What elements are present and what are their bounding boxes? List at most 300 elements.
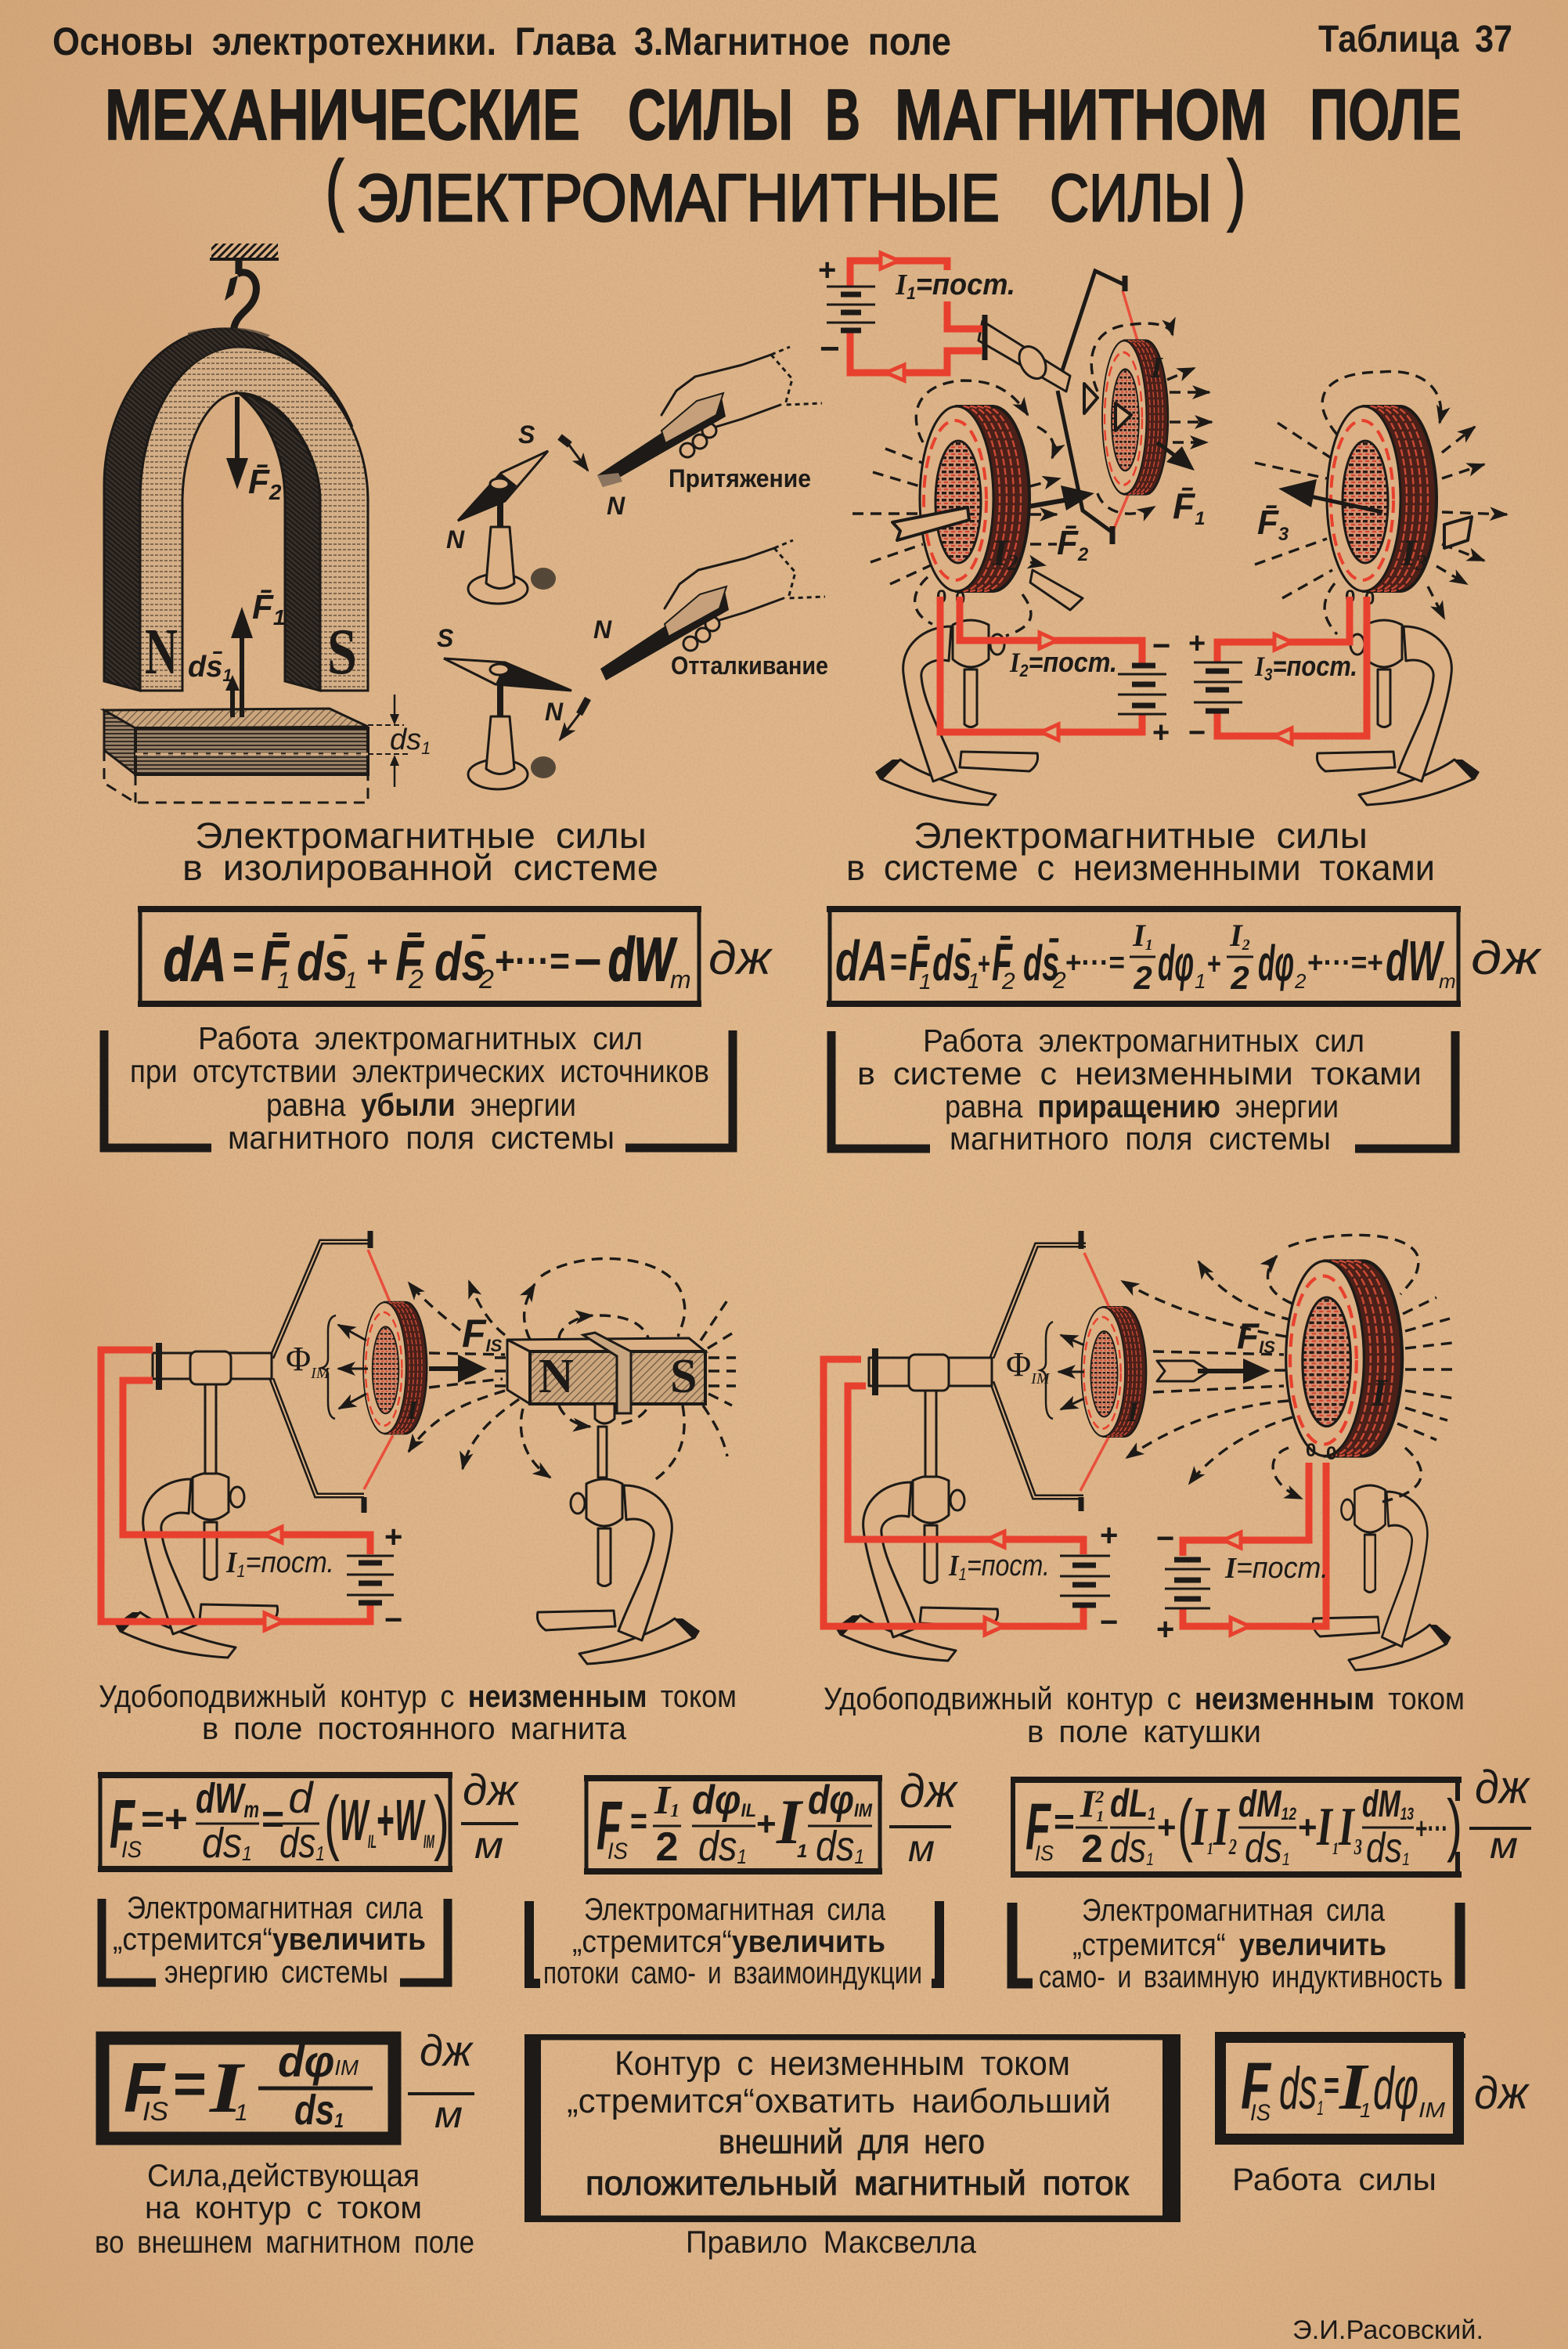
bracket note 2: „стремится“увеличить [572, 1925, 885, 1959]
bracket note 2: потоки само- и взаимоиндукции [543, 1956, 922, 1990]
formula box: isolated system: dA [164, 925, 226, 994]
flux label: Φ [286, 1340, 311, 1378]
formula: magnet: IL [368, 1831, 377, 1853]
force arrow [429, 1312, 503, 1383]
iron armature block [104, 709, 368, 803]
caption: constant currents [846, 815, 1435, 888]
arrow F1 top: F̄ [1173, 485, 1195, 526]
formula: magnet: ds [279, 1820, 324, 1867]
formula: flux: + [756, 1805, 777, 1843]
formula: magnet: d [288, 1773, 314, 1822]
formula box: constant currents: 1 [1145, 936, 1153, 954]
formula: work of force [1216, 2033, 1465, 2139]
circuit I2 [940, 597, 1170, 749]
diagram: repulsion compass: N [545, 698, 564, 726]
formula box: isolated system: dW [608, 925, 677, 994]
bracket note 3 [1012, 1893, 1460, 1994]
circuit I2: I [1009, 647, 1021, 678]
formula: magnet: 1 [315, 1842, 325, 1865]
bracket note 2: Электромагнитная сила [584, 1893, 886, 1927]
formula: flux: ds [698, 1823, 743, 1870]
formula box: constant currents: 2 [1230, 959, 1249, 996]
magnet body: N [145, 615, 178, 688]
stand left [875, 620, 1038, 805]
dimension ds1: ds [390, 723, 421, 756]
circuit I1: 1 [907, 283, 916, 303]
arrow F1: F̄ [252, 588, 273, 626]
arrow F2 top: F̄ [1057, 524, 1078, 562]
caption: isolated system: в изолированной системе [182, 847, 658, 888]
formula: inductance: 1 [1207, 1838, 1213, 1858]
formula: inductance: IS [1035, 1841, 1054, 1865]
arrow F1: ds̄ [188, 651, 222, 684]
caption: permanent magnet [99, 1680, 737, 1746]
coil in loop [363, 1302, 427, 1434]
caption: isolated system: Электромагнитные силы [195, 815, 647, 856]
formula: inductance: dM [1238, 1784, 1292, 1825]
formula box: constant currents: ds̄ [932, 935, 971, 991]
formula: magnet: m [243, 1797, 259, 1823]
bracket text: isolated: магнитного поля системы [228, 1120, 615, 1156]
coil current labels [936, 352, 1427, 609]
field lines coil 2 [852, 381, 1060, 636]
formula: work of force: dφ [1373, 2055, 1418, 2122]
unit J/m: м [434, 2095, 463, 2136]
flux arrows [1040, 1322, 1084, 1419]
flux label: Φ [1006, 1345, 1031, 1384]
formula: force on loop: IS [142, 2097, 168, 2127]
formula: flux: I [776, 1786, 804, 1857]
formula box: constant currents: I [1133, 918, 1145, 953]
title: МАГНИТНОМ [895, 75, 1267, 155]
formula: force on loop: 1 [334, 2109, 344, 2132]
formula: inductance: 2 [1081, 1827, 1103, 1871]
unit J/m [1469, 1761, 1531, 1867]
unit J/m: м [1490, 1825, 1518, 1867]
formula: inductance: + [1298, 1809, 1317, 1846]
formula: work of force: IM [1418, 2098, 1446, 2122]
flux label: IM [310, 1365, 330, 1382]
circuit right: I=пост. [1224, 1552, 1328, 1585]
formula box: isolated system: F̄ [261, 930, 290, 993]
coil current labels: 0 [1364, 588, 1375, 609]
formula: inductance: I [1317, 1797, 1338, 1857]
formula box: constant currents: + [978, 947, 990, 981]
bracket note 1: „стремится“увеличить [113, 1922, 426, 1957]
formula box: constant currents: dφ [1258, 935, 1294, 991]
formula: flux: dφ [808, 1777, 861, 1823]
unit joule: дж [1474, 2068, 1530, 2119]
formula: magnet: = [261, 1797, 284, 1841]
diagram: coils with constant currents [818, 253, 1507, 805]
circuit I2: + [1152, 716, 1170, 749]
formula box: isolated system: +···= [495, 939, 570, 983]
arrow F1 [188, 588, 285, 717]
coil current labels: I [1371, 1370, 1388, 1414]
bracket note 3: Электромагнитная сила [1082, 1893, 1386, 1928]
coil current labels: 0 [1326, 1443, 1336, 1464]
big coil [1286, 1261, 1402, 1456]
coil 2 [920, 406, 1029, 591]
diagram: attraction compass: N [446, 525, 465, 554]
bracket note 3: „стремится“ увеличить [1072, 1928, 1386, 1962]
unit J/m: дж [420, 2026, 474, 2075]
caption: constant currents: Электромагнитные силы [914, 815, 1368, 856]
diagram: horseshoe magnet and armature [104, 244, 431, 803]
formula: magnet: IM [424, 1831, 435, 1853]
arrow F2 top: 2 [1077, 544, 1089, 565]
circuit I2: =пост. [1029, 646, 1117, 678]
caption: permanent magnet: Удобоподвижный контур с неизменным током [99, 1680, 737, 1714]
formula: magnet [98, 1773, 452, 1870]
formula: work of force: IS [1250, 2100, 1271, 2126]
formula: inductance: ds [1366, 1824, 1411, 1871]
formula: magnet: ) [434, 1782, 449, 1862]
coil current labels: 0 [955, 588, 965, 609]
title: ПОЛЕ [1310, 75, 1462, 155]
formula box: isolated system: 2 [478, 965, 494, 994]
coil 3 [1327, 406, 1436, 591]
diagram: repulsion compass [437, 615, 612, 789]
formula: inductance: 3 [1354, 1835, 1362, 1860]
title: МЕХАНИЧЕСКИЕ [105, 75, 580, 155]
unit J/m [461, 1765, 519, 1867]
formula: magnet: =+ [141, 1797, 188, 1841]
bracket text: constant currents: в системе с неизменными токами [857, 1055, 1422, 1092]
icon: ceiling mount and hook [210, 244, 279, 332]
caption: force on loop: на контур с током [145, 2191, 422, 2225]
bracket text: isolated: Работа электромагнитных сил [198, 1020, 643, 1056]
unit J/m: дж [463, 1765, 519, 1814]
circuit left [824, 1359, 1118, 1640]
formula box: constant currents: dφ [1158, 935, 1194, 991]
stand of loop [115, 1473, 278, 1658]
coil current labels [1126, 1370, 1388, 1464]
formula: magnet: ds [202, 1820, 247, 1867]
coil current labels: 3 [1415, 551, 1427, 576]
caption: constant currents: в системе с неизменными токами [846, 847, 1435, 888]
dimension ds1 [368, 695, 431, 787]
unit J/m: дж [899, 1765, 959, 1817]
circuit: I [225, 1546, 238, 1579]
formula: inductance: dM [1362, 1784, 1416, 1825]
formula: inductance: ) [1447, 1785, 1462, 1863]
bracket note 1 [102, 1891, 448, 1990]
coil current: I [406, 1396, 419, 1425]
formula: work of force: F [1241, 2049, 1272, 2123]
diagram: attraction compass [446, 420, 625, 604]
formula: work of force: 1 [1317, 2096, 1324, 2120]
force arrow: IS [486, 1336, 503, 1355]
bracket note 2 [529, 1893, 939, 1990]
formula box: isolated system: m [670, 965, 691, 994]
arrow F2: F̄ [248, 463, 269, 501]
formula box: constant currents: 1 [968, 969, 980, 993]
stand of magnet [537, 1479, 700, 1664]
unit J/m [889, 1765, 959, 1870]
formula box: constant currents: ds̄ [1023, 935, 1059, 991]
permanent magnet [507, 1333, 705, 1478]
formula box: constant currents: dA [835, 930, 888, 993]
formula box: constant currents: F̄ [909, 933, 930, 992]
dimension ds1: 1 [421, 738, 431, 758]
arrow F3: 3 [1278, 524, 1289, 545]
formula box: isolated system: F̄ [395, 930, 425, 993]
caption: force on loop: во внешнем магнитном поле [95, 2225, 474, 2260]
caption: Maxwell rule: Правило Максвелла [686, 2225, 977, 2260]
formula box: isolated system: 1 [277, 968, 290, 994]
coil current labels: 0 [936, 586, 946, 608]
caption: work: Работа силы [1232, 2163, 1436, 2197]
loop frame [869, 1231, 1110, 1511]
formula: flux: IM [854, 1800, 873, 1821]
circuit left: − [1100, 1605, 1118, 1640]
circuit: 1 [236, 1561, 246, 1581]
circuit left: =пост. [967, 1550, 1050, 1582]
circuit right [1156, 1463, 1328, 1647]
diagram: repulsion compass: N [593, 615, 612, 644]
caption: force on loop: Сила,действующая [147, 2159, 420, 2193]
circuit: + [384, 1520, 402, 1554]
formula box: isolated system: ds̄ [297, 931, 348, 992]
formula: inductance: I [1080, 1781, 1095, 1825]
formula: inductance: 1 [1282, 1849, 1290, 1869]
formula: inductance: ( [1177, 1785, 1193, 1863]
arrow F3: F̄ [1257, 503, 1278, 542]
title: СИЛЫ [628, 75, 793, 155]
caption: isolated system [182, 815, 658, 888]
caption: coil field: Удобоподвижный контур с неизменным током [824, 1682, 1465, 1716]
formula box: constant currents: 2 [1242, 936, 1250, 954]
formula box: isolated system: 2 [408, 965, 424, 994]
formula: work of force: I [1339, 2051, 1370, 2123]
loop frame [153, 1231, 393, 1513]
arrow F2 top [1028, 485, 1094, 565]
stand of loop [835, 1476, 998, 1661]
formula: inductance: 12 [1281, 1804, 1297, 1824]
circuit I1 [818, 253, 1015, 381]
formula box: constant currents: m [1439, 969, 1456, 993]
flux arrows [322, 1315, 368, 1419]
maxwell rule box: Контур с неизменным током [615, 2044, 1070, 2083]
formula: flux: dφ [692, 1777, 745, 1823]
formula: work of force: 1 [1360, 2098, 1371, 2122]
formula box: isolated system: ds̄ [434, 931, 486, 992]
formula: flux: 1 [797, 1841, 807, 1862]
title [105, 75, 1462, 155]
unit: joule: дж [1471, 932, 1542, 984]
formula: magnet: W [395, 1788, 449, 1853]
arrow F2 [226, 397, 282, 504]
coil current labels: 0 [1306, 1440, 1316, 1461]
caption: coil field: в поле катушки [1027, 1715, 1261, 1749]
coil 1 [1102, 341, 1168, 494]
formula: force on loop: IM [334, 2055, 359, 2080]
bracket note 1: энергию системы [164, 1955, 388, 1990]
field lines small coil [1091, 323, 1212, 514]
formula box: constant currents: 2 [1052, 968, 1066, 994]
formula: magnet: + [377, 1788, 395, 1853]
bracket text: constant currents: магнитного поля системы [950, 1120, 1331, 1156]
formula: flux: IL [741, 1800, 756, 1821]
formula: inductance: +··· [1415, 1813, 1448, 1846]
circuit I2: 2 [1019, 661, 1029, 680]
formula: inductance: I [1191, 1797, 1213, 1857]
small coil [1082, 1307, 1146, 1437]
formula: flux: 1 [737, 1845, 747, 1868]
formula box: constant currents: + [1207, 947, 1221, 981]
formula: flux: 1 [670, 1801, 679, 1821]
force arrow: IS [1259, 1337, 1275, 1357]
circuit left: I [948, 1550, 960, 1582]
circuit right: + [1156, 1612, 1174, 1647]
formula box: constant currents: I [1230, 918, 1242, 953]
force arrow [1157, 1315, 1275, 1384]
circuit I3: + [1188, 627, 1206, 660]
formula: force on loop: ds [294, 2087, 344, 2134]
formula: magnet: ( [324, 1782, 340, 1862]
header right: Таблица 37 [1318, 19, 1512, 60]
subtitle: ЭЛЕКТРОМАГНИТНЫЕ [356, 161, 1000, 236]
circuit I2: − [1152, 629, 1170, 663]
permanent magnet: S [670, 1350, 697, 1403]
title: В [825, 75, 860, 155]
coil current labels: I [993, 532, 1007, 574]
movable frame [979, 271, 1137, 610]
formula box: constant currents: 2 [1133, 959, 1152, 996]
formula box: constant currents: 1 [919, 969, 932, 994]
formula box: isolated system: − [574, 933, 602, 990]
field lines permanent magnet [409, 1258, 736, 1481]
formula box: constant currents [827, 908, 1461, 1005]
formula box: constant currents: 2 [1001, 969, 1015, 994]
circuit left: 1 [959, 1564, 967, 1584]
diagram: loop in field of coil [824, 1231, 1459, 1670]
formula: force on loop: I [209, 2048, 246, 2127]
diagram: loop in permanent magnet field [101, 1231, 736, 1664]
formula: inductance [1011, 1779, 1462, 1875]
coil current labels: I [1401, 532, 1416, 574]
maxwell rule box: внешний для него [719, 2123, 985, 2161]
author: Э.И.Расовский. [1292, 2315, 1483, 2345]
caption: force on loop [95, 2159, 474, 2260]
bracket note 3: само- и взаимную индуктивность [1039, 1960, 1443, 1994]
formula: inductance: 13 [1400, 1804, 1414, 1824]
caption: coil field [824, 1682, 1465, 1749]
diagram: repulsion compass: S [437, 624, 454, 652]
arrow F1 top [1157, 442, 1205, 529]
circuit I3: I [1254, 651, 1266, 682]
circuit I3: =пост. [1273, 650, 1357, 682]
formula: inductance: 1 [1148, 1804, 1155, 1824]
formula: flux: = [630, 1801, 647, 1842]
formula box: isolated system: = [232, 933, 254, 990]
formula: inductance: I [1213, 1797, 1231, 1857]
unit J/m: м [474, 1825, 503, 1867]
coil current labels: I [1150, 352, 1163, 384]
formula: magnet: dW [196, 1775, 261, 1822]
formula: force on loop: F [124, 2049, 166, 2127]
formula: magnet: W [339, 1788, 394, 1853]
unit: joule: дж [708, 932, 773, 984]
diagram: attraction compass: S [518, 420, 535, 449]
formula: flux: 2 [656, 1824, 678, 1870]
circuit [101, 1350, 402, 1637]
circuit right: − [1156, 1521, 1174, 1556]
formula: inductance: = [1054, 1801, 1075, 1842]
circuit: =пост. [246, 1546, 334, 1579]
bracket text: isolated [104, 1020, 733, 1156]
formula box: constant currents: 1 [1195, 969, 1206, 993]
bracket text: isolated: при отсутствии электрических источников [130, 1053, 709, 1089]
label: attraction: Притяжение [669, 464, 811, 493]
formula: force on loop: = [173, 2053, 207, 2116]
formula: work of force: = [1324, 2063, 1339, 2107]
maxwell rule box [524, 2034, 1181, 2222]
circuit I3: − [1188, 716, 1206, 749]
flux label: IM [1030, 1370, 1051, 1387]
coil current labels: 0 [1345, 586, 1355, 608]
formula: inductance: 1 [1096, 1808, 1104, 1825]
bracket text: constant currents [831, 1023, 1455, 1156]
formula: flux: ds [816, 1823, 860, 1870]
label: repulsion: Отталкивание [671, 651, 828, 680]
formula: inductance: ds [1245, 1824, 1289, 1871]
subtitle [326, 145, 1245, 236]
formula: magnet: F [110, 1785, 135, 1863]
formula box: isolated system [138, 908, 701, 1005]
formula box: constant currents: = [890, 940, 907, 985]
bracket text: constant currents: Работа электромагнитных сил [923, 1023, 1364, 1059]
circuit I3: 3 [1264, 665, 1273, 684]
formula: force on loop: dφ [278, 2037, 336, 2086]
formula box: isolated system: 1 [344, 968, 358, 994]
formula: inductance: F [1026, 1790, 1052, 1864]
formula box: constant currents: 2 [1294, 969, 1307, 993]
circuit I3 [1188, 597, 1367, 749]
formula: flux [584, 1777, 882, 1871]
formula box: constant currents: +···= [1065, 947, 1125, 980]
formula box: constant currents: +···=+ [1307, 947, 1383, 980]
permanent magnet: N [539, 1350, 574, 1403]
arrow F3 [1257, 479, 1382, 545]
formula: inductance: ds [1110, 1824, 1155, 1871]
circuit I1: I [895, 269, 907, 301]
arrow F1: 1 [222, 666, 232, 685]
arrow F1: 1 [273, 605, 285, 630]
formula: inductance: I [1338, 1797, 1356, 1857]
magnet body [104, 327, 368, 691]
bracket text: isolated: равна убыли энергии [266, 1087, 576, 1123]
formula: force on loop: 1 [235, 2100, 248, 2126]
circuit I1: + [818, 253, 836, 287]
coil current labels: I [1126, 1396, 1140, 1427]
maxwell rule box: положительный магнитный поток [586, 2164, 1130, 2203]
diagram: attraction compass: N [607, 492, 625, 520]
formula box: isolated system: + [366, 936, 388, 987]
field lines coil [1122, 1235, 1459, 1502]
formula: inductance: 2 [1228, 1835, 1237, 1860]
formula box: constant currents: dW [1386, 930, 1445, 993]
field lines coil 3 [1255, 371, 1507, 634]
unit J/m: дж [1475, 1761, 1531, 1813]
formula: inductance: dL [1110, 1781, 1158, 1825]
icon: hand with magnet (repulsion) [600, 540, 825, 680]
formula: inductance: 1 [1402, 1849, 1410, 1869]
arrow F1 top: 1 [1195, 508, 1205, 529]
formula: inductance: 1 [1332, 1838, 1339, 1858]
bracket note 1: Электромагнитная сила [127, 1891, 424, 1925]
